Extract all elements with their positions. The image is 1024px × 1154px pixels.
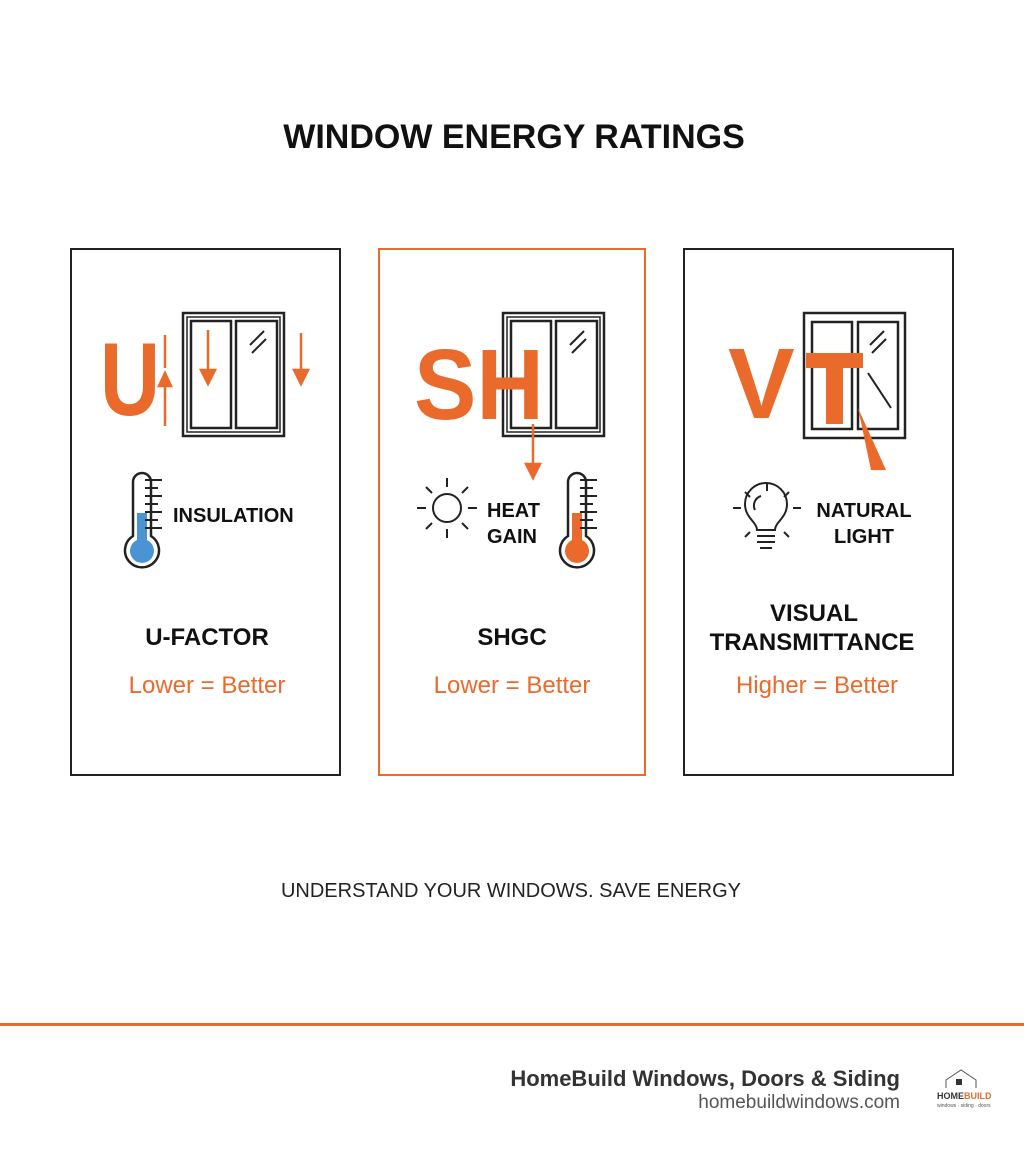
label: heat gain: HEAT xyxy=(487,500,540,522)
logo: windows · siding · doors xyxy=(937,1103,991,1109)
light beam xyxy=(858,408,886,470)
heading: shgc: SHGC xyxy=(477,624,547,651)
panel: visual transmittance xyxy=(684,249,953,775)
panel: visual transmittance: TRANSMITTANCE xyxy=(710,629,914,656)
logo: HOMEBUILD xyxy=(937,1091,992,1101)
title: WINDOW ENERGY RATINGS xyxy=(283,118,745,156)
rule: lower better: Lower = Better xyxy=(434,672,590,699)
icon: sun xyxy=(417,478,477,538)
icon: thermometer blue xyxy=(125,473,162,567)
label: natural light: NATURAL xyxy=(816,500,912,522)
icon: light bulb xyxy=(733,483,801,548)
label: insulation: INSULATION xyxy=(173,505,294,527)
icon: window shgc xyxy=(503,313,604,436)
tagline: UNDERSTAND YOUR WINDOWS. SAVE ENERGY xyxy=(281,880,741,902)
heading: u-factor: U-FACTOR xyxy=(145,624,269,651)
letter U: U xyxy=(100,322,160,438)
letters VT: V xyxy=(728,328,795,440)
icon: thermometer orange xyxy=(560,473,597,567)
panel: shgc xyxy=(379,249,645,775)
icon: window vt xyxy=(804,313,905,438)
footer company: HomeBuild Windows, Doors & Siding xyxy=(510,1066,900,1091)
footer company: homebuildwindows.com xyxy=(698,1092,900,1113)
letters SH: SH xyxy=(414,329,544,441)
rule: lower better: Lower = Better xyxy=(129,672,285,699)
arrows: heat flow xyxy=(159,330,308,426)
panel: visual transmittance: LIGHT xyxy=(834,526,894,548)
panel: u-factor xyxy=(71,249,340,775)
logo xyxy=(937,1070,992,1109)
heading: visual transmittance: VISUAL xyxy=(770,600,858,627)
panel: shgc: GAIN xyxy=(487,526,537,548)
arrow: heat down xyxy=(526,424,540,478)
rule: higher better: Higher = Better xyxy=(736,672,898,699)
footer company xyxy=(510,1066,900,1113)
icon: window u xyxy=(183,313,284,436)
